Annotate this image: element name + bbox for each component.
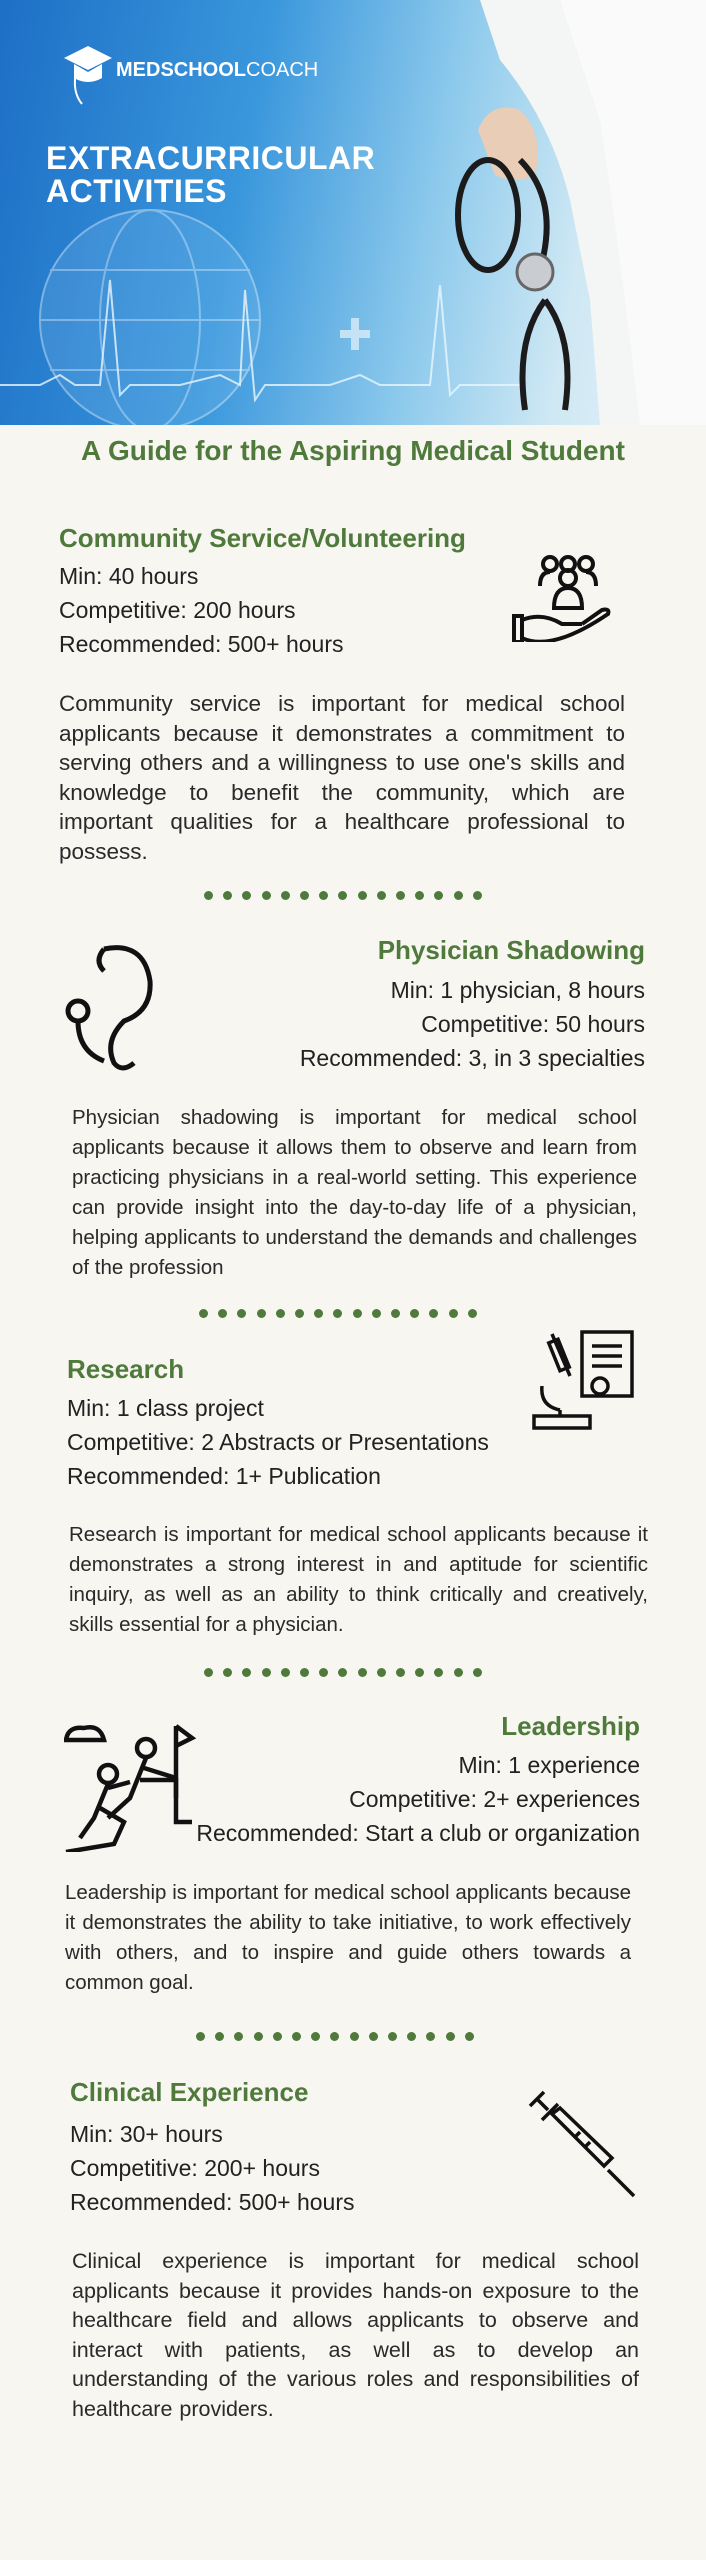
requirements: Min: 1 experience xyxy=(458,1752,640,1778)
requirements: Min: 1 physician, 8 hours xyxy=(391,977,645,1003)
hand xyxy=(478,108,538,180)
heading: Research xyxy=(67,1354,184,1384)
requirements xyxy=(196,1752,640,1846)
heading: Leadership xyxy=(501,1711,640,1741)
globe xyxy=(40,210,260,430)
paragraph: Research is important for medical school applicants because it demonstrates a strong interest in and aptitude for scientific inquiry, as well as an ability to think critically and creatively, skills essential for a physician. xyxy=(69,1523,648,1636)
requirements: Competitive: 200+ hours xyxy=(70,2155,320,2181)
subtitle: A Guide for the Aspiring Medical Student xyxy=(81,435,625,466)
requirements xyxy=(67,1395,489,1489)
header banner xyxy=(0,0,706,425)
section: clinical experience xyxy=(70,2077,639,2420)
section: research xyxy=(67,1330,648,1636)
requirements: Recommended: 500+ hours xyxy=(70,2189,354,2215)
requirements xyxy=(70,2121,354,2215)
icon: syringe xyxy=(528,2090,636,2198)
requirements: Recommended: 1+ Publication xyxy=(67,1463,381,1489)
heading: Clinical Experience xyxy=(70,2077,308,2107)
section: community service xyxy=(59,523,625,864)
requirements xyxy=(59,563,343,657)
icon: stethoscope xyxy=(66,945,153,1070)
requirements: Min: 30+ hours xyxy=(70,2121,223,2147)
main title: EXTRACURRICULAR xyxy=(46,140,375,176)
paragraph: Community service is important for medical school applicants because it demonstrates a commitment to serving others and a willingness to use one's skills and knowledge to benefit the community, which are important qualities for a healthcare professional to possess. xyxy=(59,691,625,864)
heading: Community Service/Volunteering xyxy=(59,523,466,553)
requirements: Competitive: 200 hours xyxy=(59,597,296,623)
requirements: Min: 40 hours xyxy=(59,563,198,589)
heartbeat line xyxy=(0,280,520,400)
logo xyxy=(64,46,318,105)
requirements: Competitive: 50 hours xyxy=(421,1011,645,1037)
requirements: Min: 1 class project xyxy=(67,1395,264,1421)
heading: Physician Shadowing xyxy=(378,935,645,965)
requirements: Recommended: 500+ hours xyxy=(59,631,343,657)
requirements: Recommended: Start a club or organization xyxy=(196,1820,640,1846)
paragraph: Clinical experience is important for medical school applicants because it provides hands-on exposure to the healthcare field and allows applicants to observe and interact with patients, as well as to develop an understanding of the various roles and responsibilities of healthcare providers. xyxy=(72,2249,639,2420)
main title: ACTIVITIES xyxy=(46,173,227,209)
coat xyxy=(480,0,706,425)
paragraph: Leadership is important for medical school applicants because it demonstrates the ability to take initiative, to work effectively with others, and to inspire and guide others towards a common goal. xyxy=(65,1881,631,1994)
requirements: Recommended: 3, in 3 specialties xyxy=(300,1045,645,1071)
plus sign xyxy=(340,318,370,350)
main title xyxy=(46,140,375,209)
section: physician shadowing xyxy=(66,935,645,1279)
section: leadership xyxy=(64,1711,640,1994)
logo: MEDSCHOOLCOACH xyxy=(116,59,318,81)
paragraph: Physician shadowing is important for medical school applicants because it allows them to observe and learn from practicing physicians in a real-world setting. This experience can provide insight into the day-to-day life of a physician, helping applicants to understand the demands and challenges of the profession xyxy=(72,1106,637,1279)
icon: microscope xyxy=(532,1330,634,1430)
stethoscope xyxy=(458,160,568,410)
icon: climbing team xyxy=(64,1724,196,1852)
icon: hand with people xyxy=(512,555,610,642)
requirements xyxy=(300,977,645,1071)
requirements: Competitive: 2 Abstracts or Presentations xyxy=(67,1429,489,1455)
requirements: Competitive: 2+ experiences xyxy=(349,1786,640,1812)
